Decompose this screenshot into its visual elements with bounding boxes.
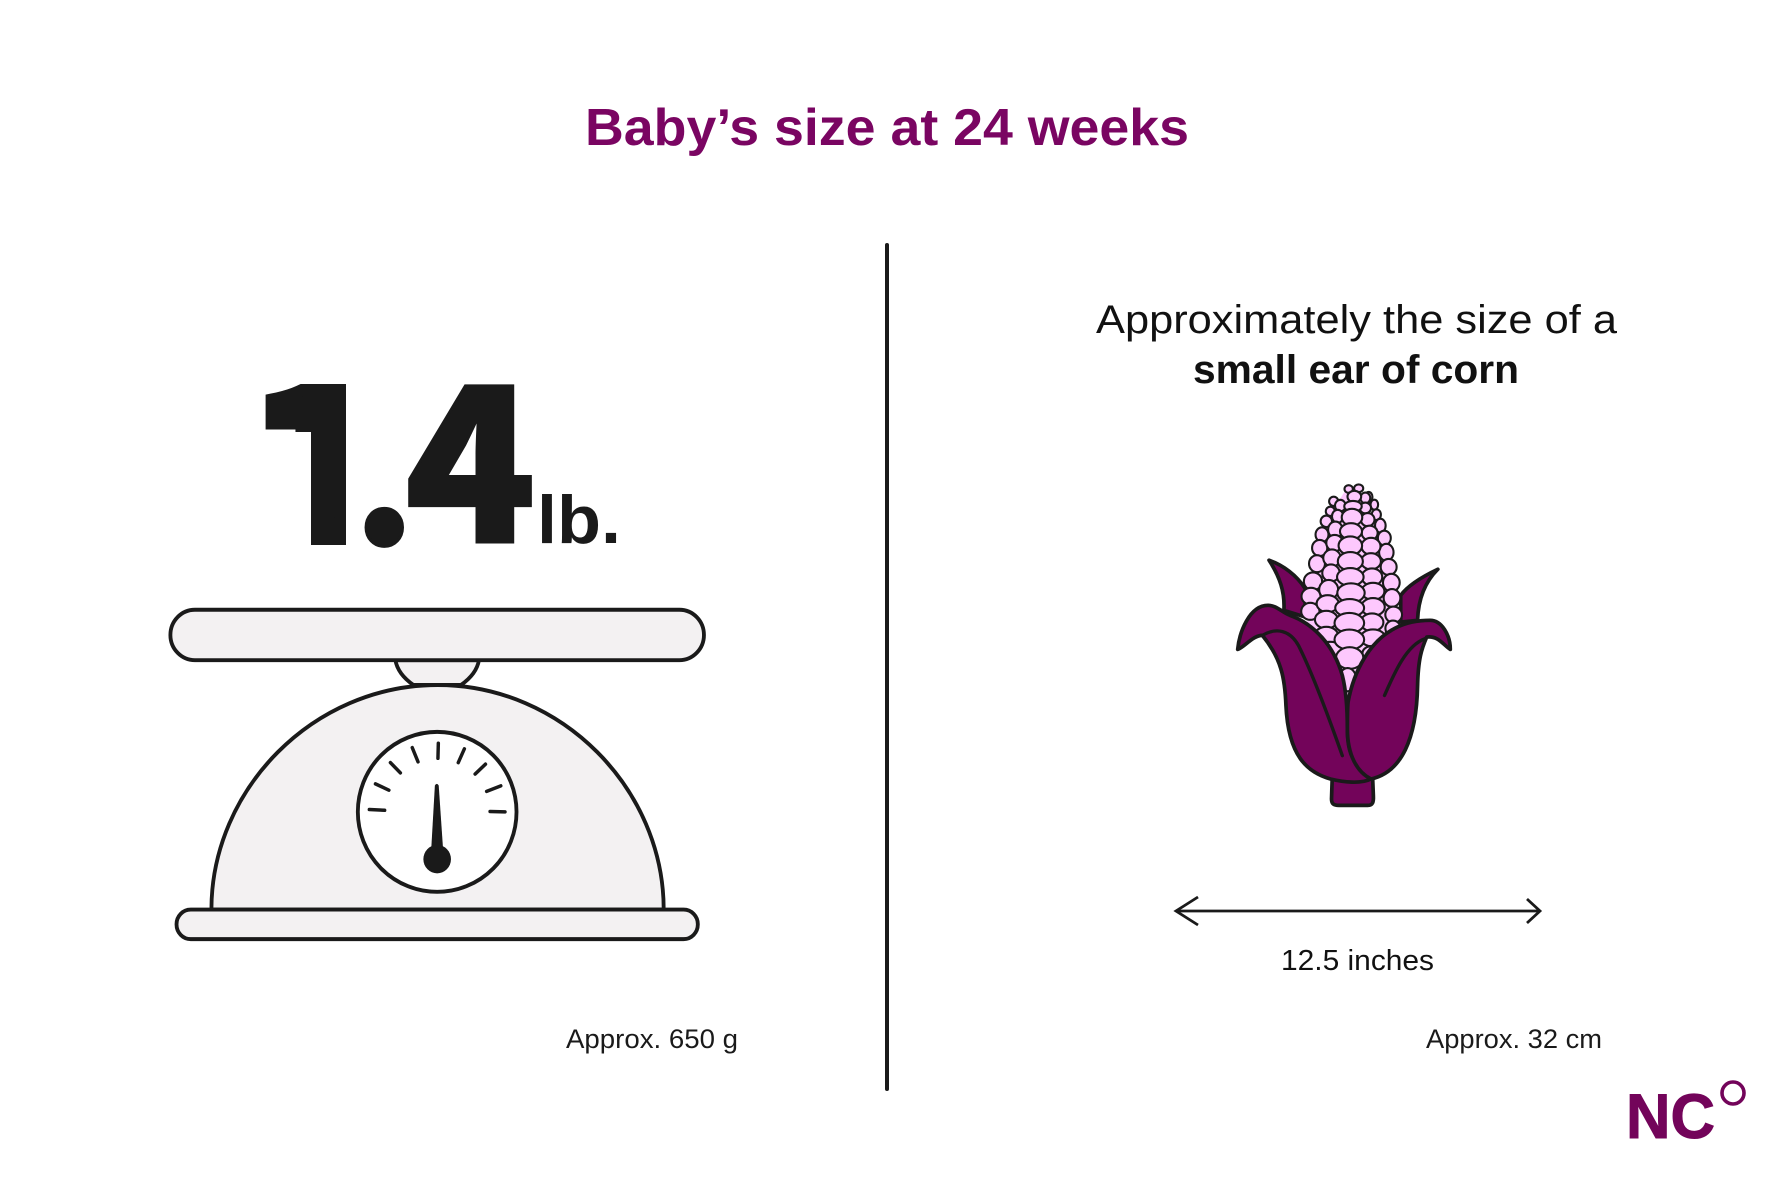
dial needle: [423, 784, 451, 873]
weight value: [266, 384, 616, 548]
comparison heading: Approximately the size of a: [1096, 298, 1618, 342]
arrow: width span: [1176, 897, 1540, 925]
length metric note: Approx. 32 cm: [1426, 1024, 1602, 1054]
comparison heading: small ear of corn: [1193, 348, 1519, 392]
weight metric note: Approx. 650 g: [566, 1024, 738, 1054]
husk vein lines: [1262, 631, 1425, 756]
corn kernels: [1301, 484, 1402, 716]
weight value: 1: [250, 290, 383, 606]
front left husk: [1238, 605, 1371, 782]
corn stem: [1332, 779, 1373, 805]
scale dome: [211, 685, 664, 910]
icon: ear of corn: [1238, 484, 1450, 805]
title: Baby’s size at 24 weeks: [585, 99, 1189, 157]
scale neck: [395, 660, 479, 685]
length label: 12.5 inches: [1281, 945, 1434, 977]
weight value: .: [354, 344, 414, 594]
scale pan: [170, 610, 704, 660]
dial ticks: [369, 743, 505, 812]
vertical divider: [885, 245, 889, 1089]
front right husk: [1347, 620, 1450, 779]
comparison heading: [1096, 298, 1618, 392]
icon: kitchen scale: [170, 610, 704, 939]
weight value: 4: [405, 293, 536, 604]
back husk leaves: [1269, 560, 1438, 622]
scale base: [177, 910, 698, 939]
logo: NC: [1626, 1082, 1715, 1152]
weight value: lb.: [537, 482, 621, 558]
dial face: [358, 732, 517, 892]
